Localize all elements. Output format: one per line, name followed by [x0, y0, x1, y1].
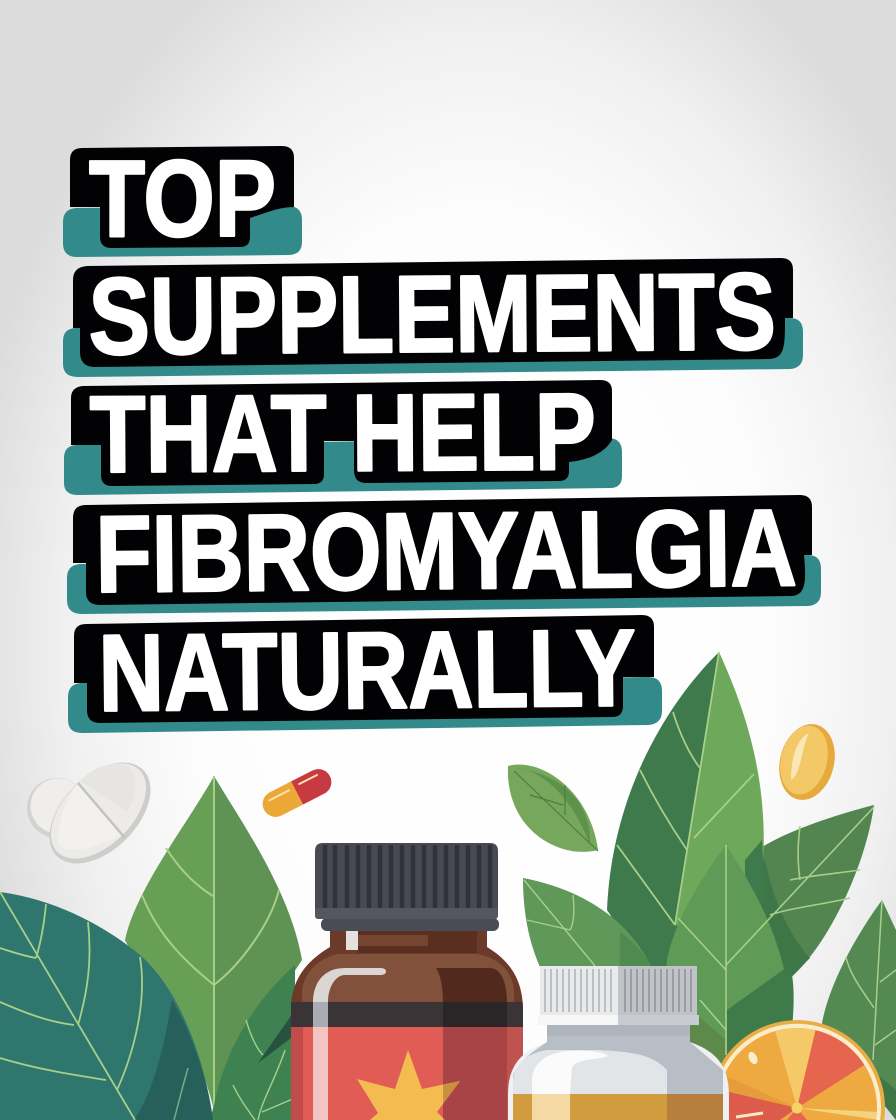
- icon: white supplement bottle: [508, 966, 729, 1120]
- icon: brown supplement bottle: [285, 843, 530, 1120]
- bottle body: [508, 1020, 729, 1120]
- icon: small floating leaf: [508, 765, 598, 852]
- title line: SUPPLEMENTS: SUPPLEMENTS: [88, 251, 776, 378]
- bottle cap: [315, 843, 499, 931]
- icon: white tablets: [27, 744, 169, 882]
- title: [63, 138, 821, 735]
- star on label: [357, 1050, 460, 1120]
- icon: citrus slice: [721, 1020, 885, 1120]
- icon: yellow softgel: [771, 718, 843, 806]
- leaf: tall back leaf: [607, 652, 765, 975]
- leaf: front middle leaf: [660, 845, 794, 1065]
- leaf: large teal leaf: [0, 892, 213, 1120]
- leaf: centre green leaf: [125, 776, 302, 1110]
- title line: THAT HELP: THAT HELP: [89, 371, 596, 496]
- leaf: lower green leaf behind bottle: [210, 965, 295, 1120]
- leaf: left back leaf: [523, 878, 655, 1000]
- title line: NATURALLY: NATURALLY: [98, 607, 636, 735]
- title line: TOP: TOP: [89, 138, 276, 260]
- bottle cap: [538, 966, 699, 1025]
- icon: red and yellow capsule: [258, 765, 336, 821]
- leaf: large right leaf: [745, 805, 874, 980]
- bottle body: [291, 931, 523, 1120]
- leaf: far right leaf: [822, 900, 896, 1120]
